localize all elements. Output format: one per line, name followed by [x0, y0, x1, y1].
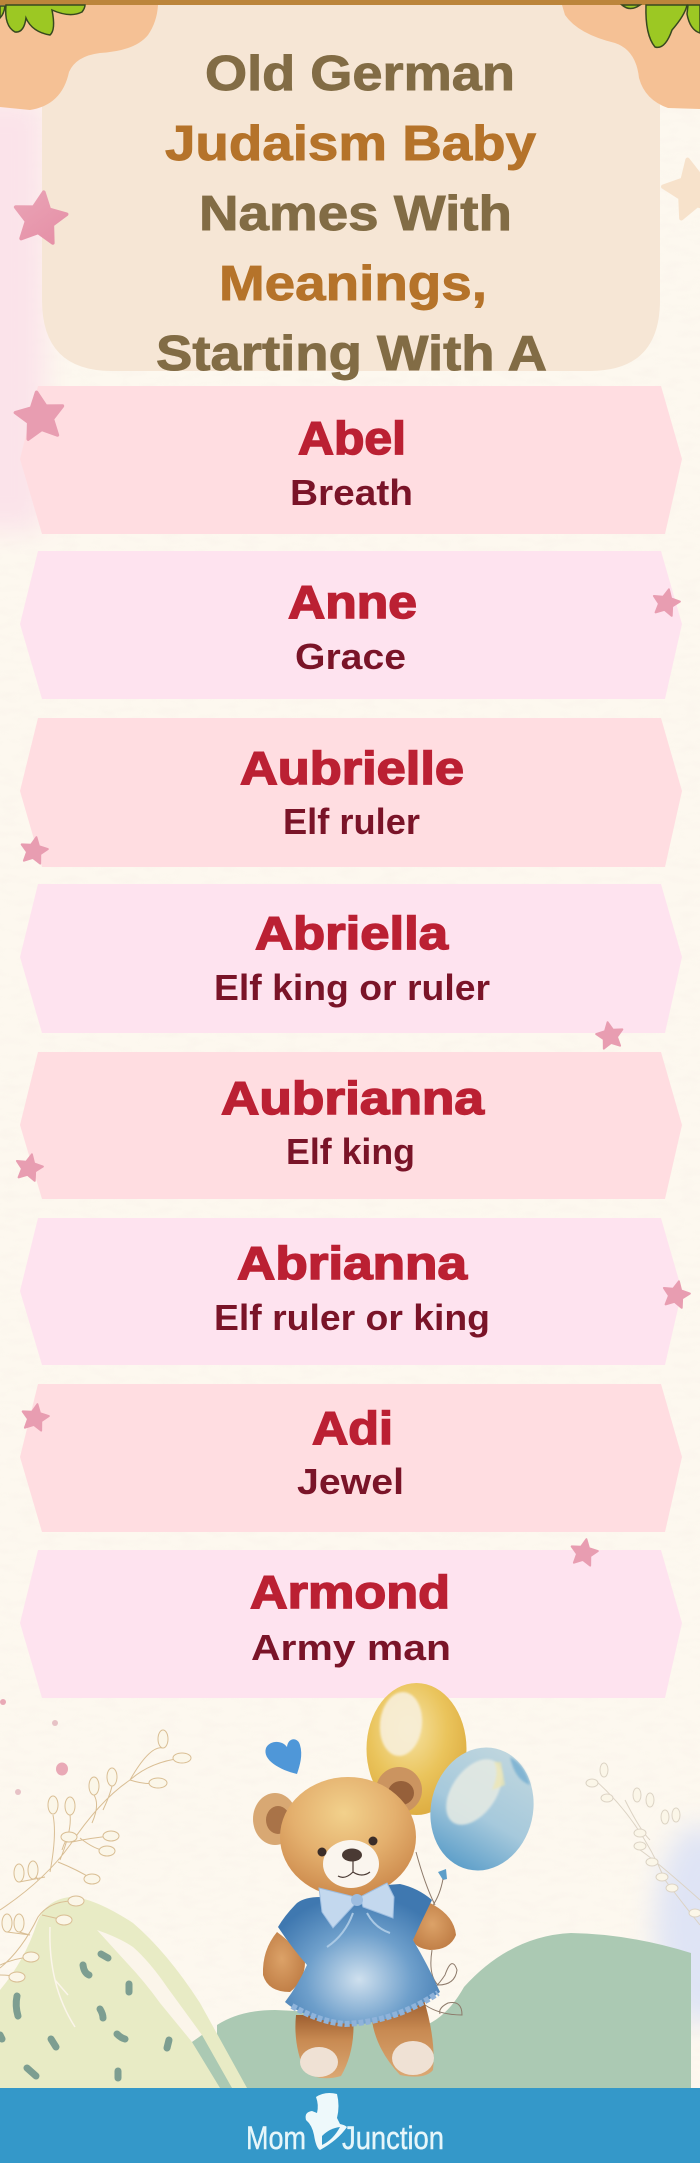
right leg	[371, 2000, 434, 2077]
panel: Abel: Abel	[298, 412, 406, 464]
logo wordmark: Mom	[246, 2120, 306, 2156]
icon: leaves left	[0, 5, 85, 35]
panel: Adi: Adi	[312, 1402, 393, 1454]
right hill	[217, 1933, 691, 2088]
panel: Armond	[20, 1550, 682, 1698]
eyes	[318, 1836, 378, 1856]
logo wordmark	[246, 2120, 444, 2156]
title: Old German	[205, 47, 515, 101]
panel: Abrianna: Elf ruler or king	[214, 1297, 490, 1338]
icon: yellow balloon	[366, 1683, 466, 1815]
title panel	[42, 5, 660, 371]
panel: Adi	[20, 1384, 682, 1532]
logo silhouette	[306, 2093, 347, 2150]
panel: Anne: Anne	[288, 576, 417, 628]
panel: Aubrielle: Elf ruler	[283, 801, 420, 842]
title	[156, 47, 547, 381]
branch right	[586, 1763, 700, 1925]
title: Names With	[199, 187, 512, 241]
branch left	[0, 1730, 191, 1982]
panel: Anne	[20, 551, 682, 699]
panel: Abel	[20, 386, 682, 534]
panel: Armond: Army man	[251, 1627, 451, 1668]
stars	[13, 389, 692, 1566]
right arm	[413, 1903, 456, 1950]
top bar	[0, 0, 700, 5]
head	[280, 1777, 416, 1897]
left hill	[0, 1897, 247, 2088]
icon: balloon strings	[416, 1852, 462, 2015]
left ear	[253, 1793, 297, 1845]
panel: Abrianna: Abrianna	[237, 1237, 467, 1289]
panel: Aubrielle	[20, 718, 682, 867]
panel: Anne: Grace	[295, 636, 406, 677]
panel: Abriella	[20, 884, 682, 1033]
muzzle	[323, 1840, 379, 1888]
left foot	[300, 2047, 338, 2077]
title: Starting With A	[156, 327, 547, 381]
panel: Aubrianna	[20, 1052, 682, 1199]
right ear	[376, 1767, 422, 1813]
logo heart cut-out	[322, 2127, 340, 2145]
nose	[342, 1848, 362, 1862]
left arm	[263, 1932, 305, 1992]
panel: Abriella: Abriella	[255, 907, 448, 959]
panel: Adi: Jewel	[297, 1461, 404, 1502]
corner blob right	[562, 5, 700, 109]
bow	[319, 1883, 394, 1928]
icon: heart	[265, 1739, 301, 1774]
left leg	[295, 2015, 354, 2078]
panel: Abel: Breath	[290, 472, 413, 513]
panel: Armond: Armond	[250, 1566, 450, 1618]
panel: Aubrianna: Elf king	[286, 1131, 415, 1172]
star	[12, 189, 69, 244]
panel: Aubrielle: Aubrielle	[240, 742, 464, 794]
panel: Abriella: Elf king or ruler	[214, 967, 490, 1008]
bear	[253, 1767, 456, 2078]
panel: Abrianna	[20, 1218, 682, 1365]
mouth	[338, 1861, 370, 1877]
title: Judaism Baby	[165, 117, 536, 171]
logo	[246, 2093, 444, 2156]
right foot	[392, 2041, 434, 2075]
star beige	[659, 154, 700, 221]
decorative dots	[0, 1699, 68, 1795]
footer bar	[0, 2088, 700, 2163]
icon: leaves right	[622, 5, 700, 47]
dress	[278, 1884, 440, 2024]
icon: blue balloon	[418, 1737, 546, 1881]
panel: Aubrianna: Aubrianna	[221, 1072, 484, 1124]
logo wordmark: Junction	[342, 2120, 444, 2156]
corner blob left	[0, 5, 158, 110]
title: Meanings,	[219, 257, 487, 311]
